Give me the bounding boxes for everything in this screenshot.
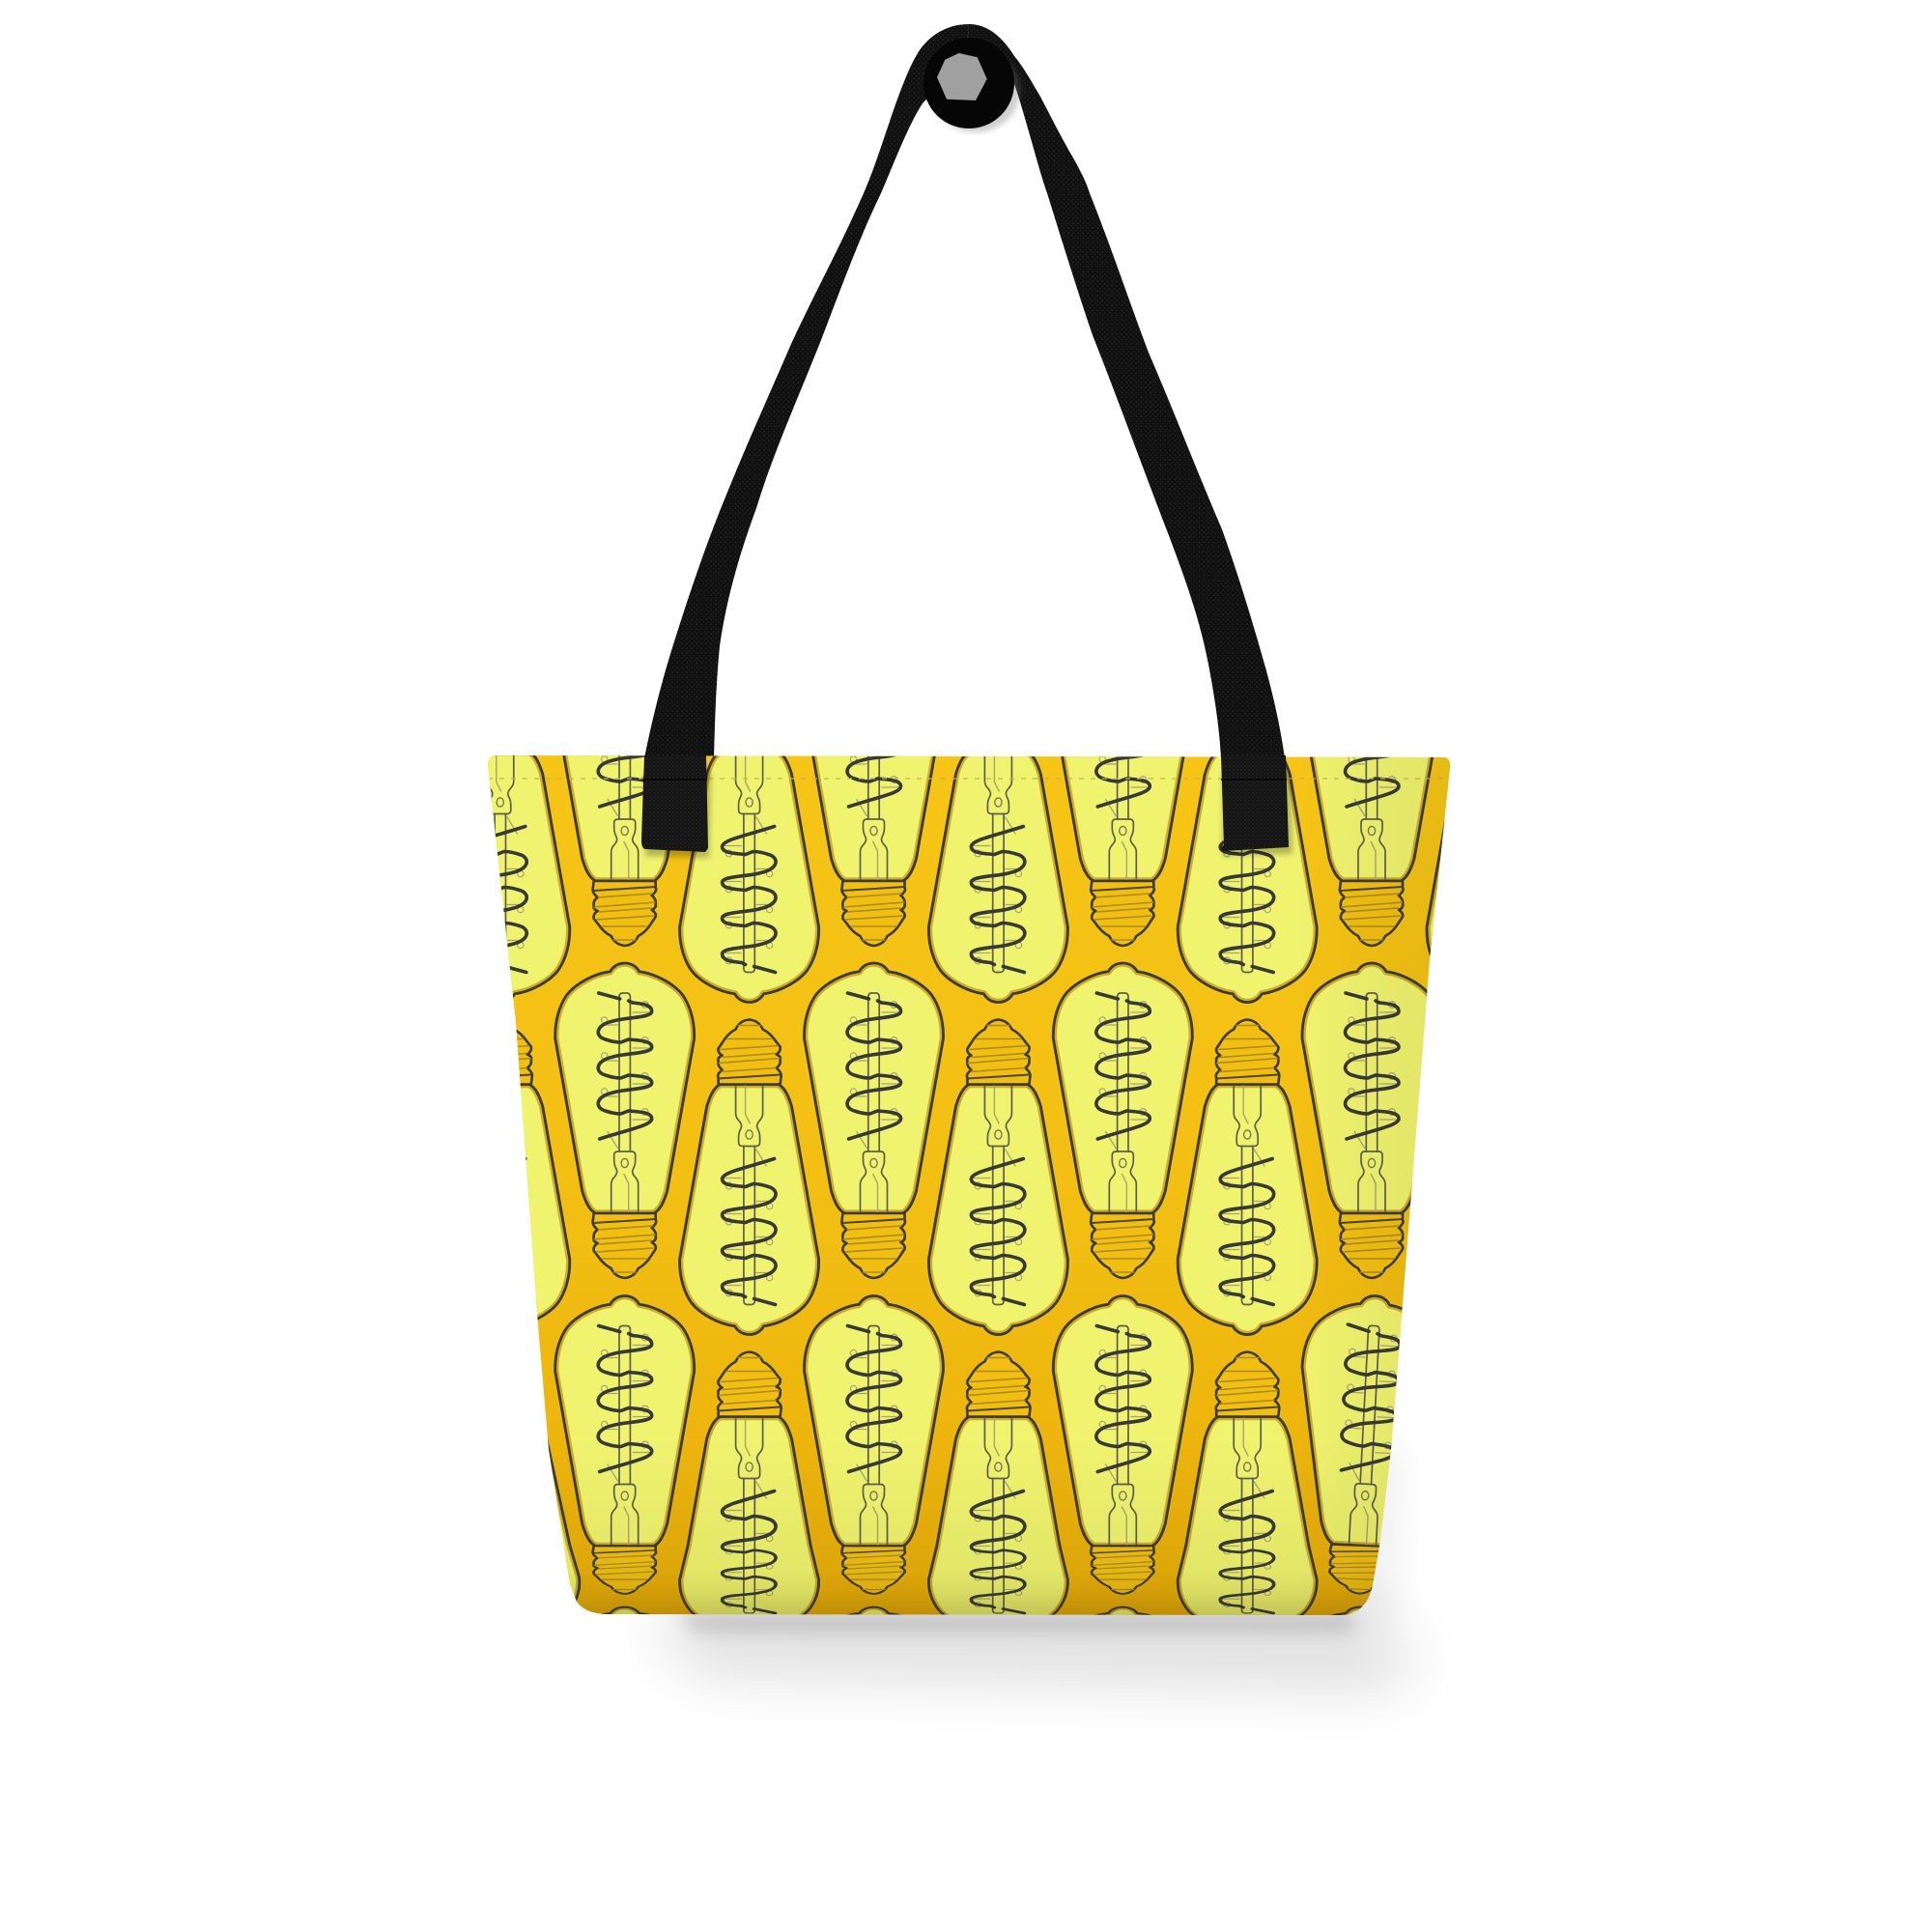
peg hexagonal centre xyxy=(937,53,987,100)
top hem stitching xyxy=(488,778,1452,780)
bulb pattern: main area xyxy=(488,755,1445,1546)
shoulder strap: right xyxy=(966,24,1285,758)
product photo: tote bag on white xyxy=(488,24,1451,1706)
tote bag body with light-bulb pattern xyxy=(488,755,1451,1615)
wall peg xyxy=(923,38,1020,132)
bulb pattern: compressed bottom fold xyxy=(564,848,1379,1615)
shoulder strap: left xyxy=(644,24,969,758)
strap tab stitched to bag, right xyxy=(1221,755,1293,856)
bag shadow on ground xyxy=(647,1430,1420,1690)
bottom and side shading xyxy=(561,757,1450,1615)
strap tab stitched to bag, left xyxy=(641,755,711,858)
